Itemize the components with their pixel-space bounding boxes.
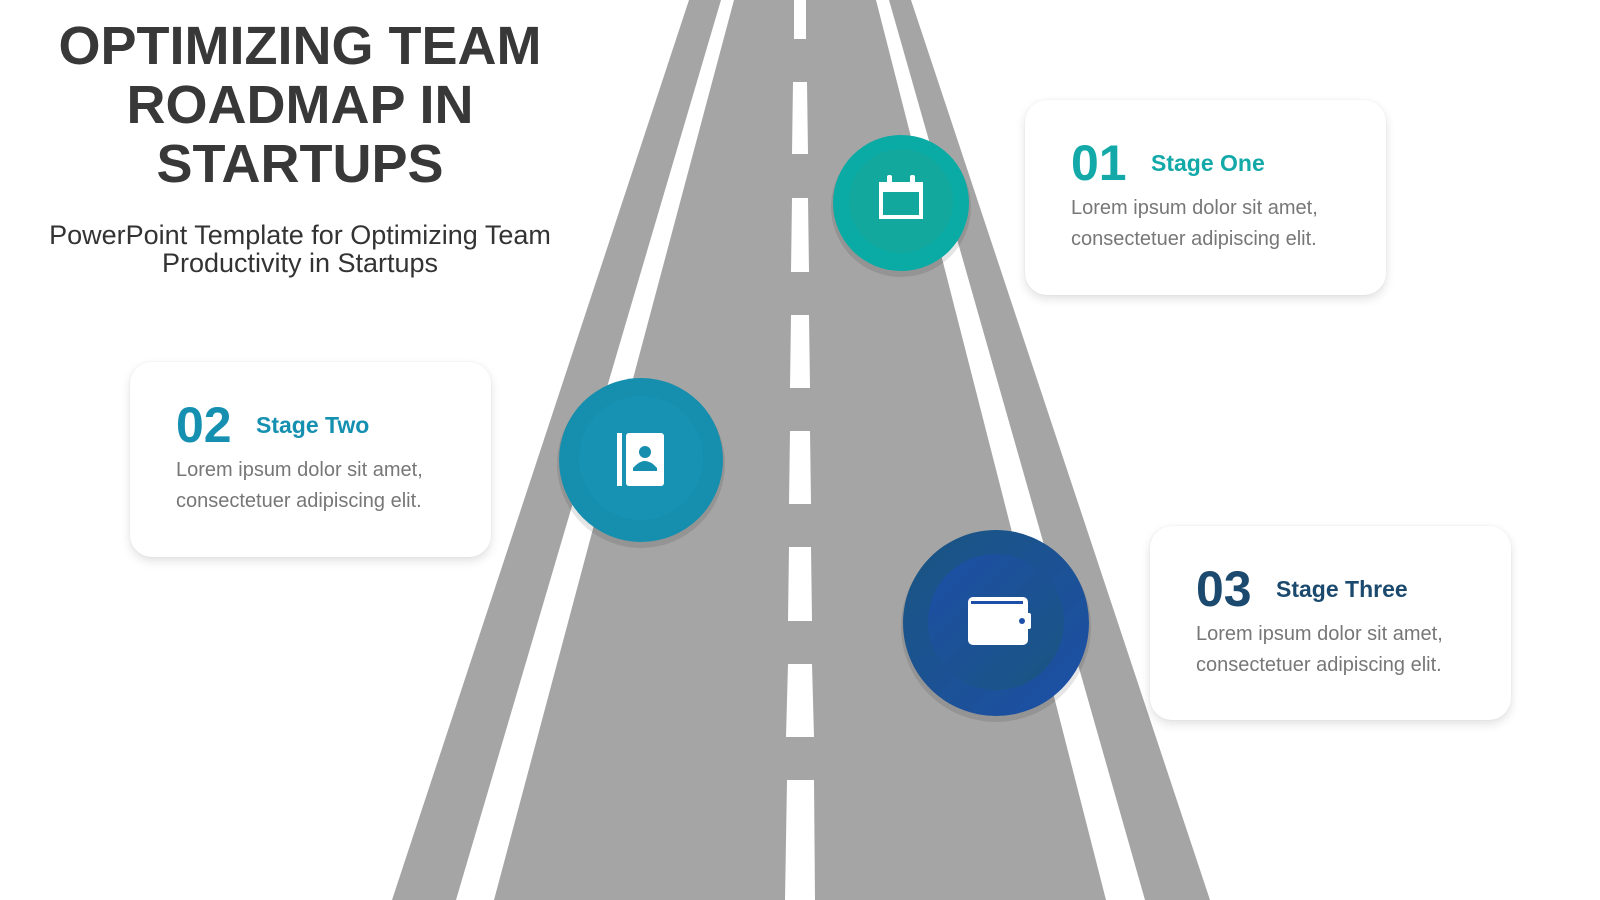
icon: wallet circle	[901, 530, 1091, 722]
text: stage three: Lorem ipsum dolor sit amet,	[1196, 623, 1443, 645]
title	[59, 16, 541, 194]
icon: contact book circle	[557, 378, 725, 548]
subtitle	[49, 220, 551, 278]
heading: stage two: Stage Two	[256, 412, 369, 438]
text: stage one: Lorem ipsum dolor sit amet,	[1071, 197, 1318, 219]
heading: stage one: Stage One	[1151, 150, 1265, 176]
text: stage three: consectetuer adipiscing elit.	[1196, 654, 1442, 676]
subtitle: PowerPoint Template for Optimizing Team	[49, 220, 551, 250]
title: ROADMAP IN	[126, 75, 474, 135]
text: stage two: consectetuer adipiscing elit.	[176, 490, 422, 512]
title: OPTIMIZING TEAM	[59, 16, 541, 76]
title: STARTUPS	[156, 134, 444, 194]
number 03: 03	[1196, 561, 1252, 617]
heading: stage three: Stage Three	[1276, 576, 1408, 602]
text: stage two: Lorem ipsum dolor sit amet,	[176, 459, 423, 481]
number 02: 02	[176, 397, 232, 453]
subtitle: Productivity in Startups	[162, 248, 438, 278]
text: stage one	[1071, 197, 1318, 250]
icon: calendar circle	[831, 135, 971, 277]
panel: stage one	[1025, 100, 1386, 295]
text: stage three	[1196, 623, 1443, 676]
panel: stage three	[1150, 526, 1511, 720]
number 01: 01	[1071, 135, 1127, 191]
text: stage two	[176, 459, 423, 512]
panel: stage two	[130, 362, 491, 557]
text: stage one: consectetuer adipiscing elit.	[1071, 228, 1317, 250]
